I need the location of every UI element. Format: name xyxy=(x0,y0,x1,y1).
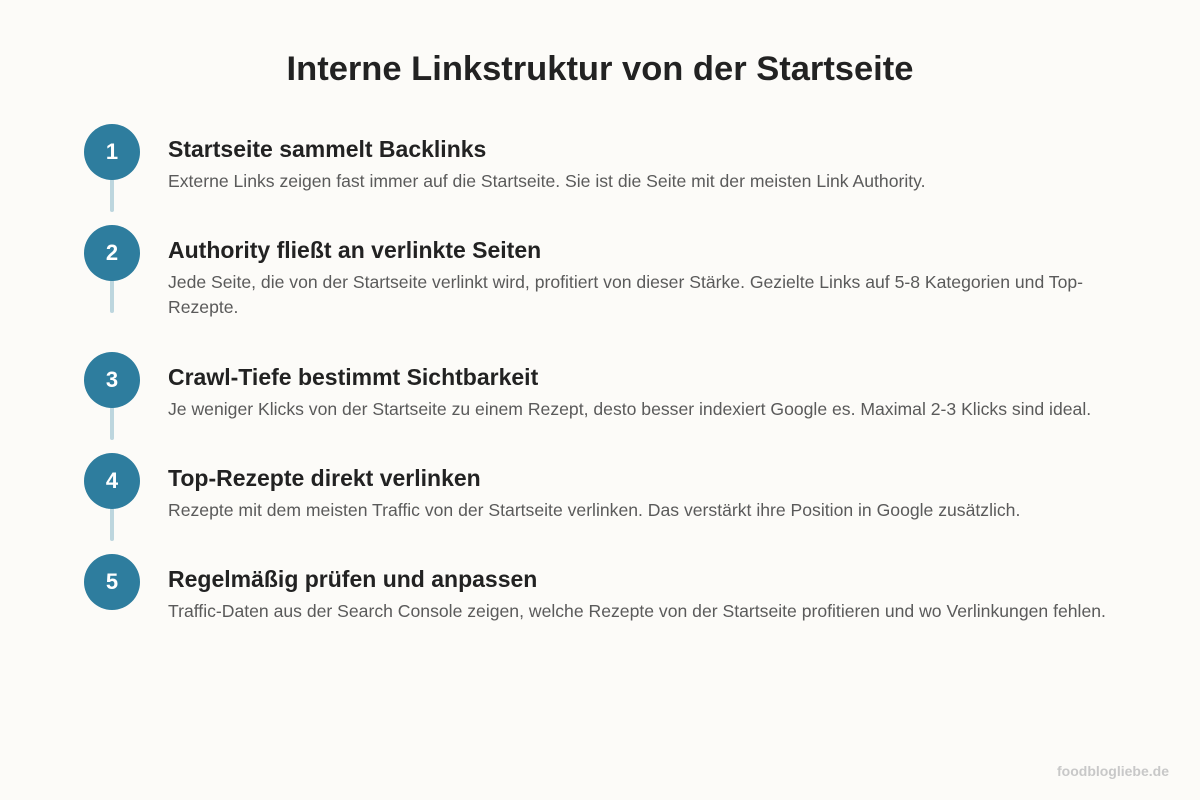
step 1 text: Externe Links zeigen fast immer auf die Startseite. Sie ist die Seite mit der meisten Link Authority. xyxy=(168,171,926,191)
step 2 xyxy=(84,225,1083,317)
step 5 text: Traffic-Daten aus der Search Console zeigen, welche Rezepte von der Startseite profitieren und wo Verlinkungen fehlen. xyxy=(168,601,1106,621)
step 4 circle: 4 xyxy=(106,468,118,493)
step 1 xyxy=(84,124,926,191)
step 2 heading: Authority fließt an verlinkte Seiten xyxy=(168,237,541,263)
step 3 heading: Crawl-Tiefe bestimmt Sichtbarkeit xyxy=(168,364,538,390)
step 1 circle xyxy=(84,124,140,180)
step 5 xyxy=(84,554,1106,621)
step 2 text: Jede Seite, die von der Startseite verlinkt wird, profitiert von dieser Stärke. Gezielte Links auf 5-8 Kategorien und Top- xyxy=(168,272,1083,292)
title: Interne Linkstruktur von der Startseite xyxy=(287,50,913,88)
step 3 circle: 3 xyxy=(106,367,118,392)
step 5 heading: Regelmäßig prüfen und anpassen xyxy=(168,566,537,592)
step 1 heading: Startseite sammelt Backlinks xyxy=(168,136,486,162)
step 2 circle xyxy=(84,225,140,281)
step 5 circle: 5 xyxy=(106,569,118,594)
connector line 1 xyxy=(110,178,114,212)
step 3 circle xyxy=(84,352,140,408)
footer brand: foodblogliebe.de xyxy=(1057,763,1169,779)
connector line 3 xyxy=(110,406,114,440)
step 1 circle: 1 xyxy=(106,139,118,164)
step 3 text: Je weniger Klicks von der Startseite zu einem Rezept, desto besser indexiert Google es. Maximal 2-3 Klicks sind ideal. xyxy=(168,399,1091,419)
step 4 circle xyxy=(84,453,140,509)
step 5 circle xyxy=(84,554,140,610)
connector line 4 xyxy=(110,507,114,541)
step 2 text xyxy=(168,272,1083,317)
connector line 2 xyxy=(110,279,114,313)
step 2 circle: 2 xyxy=(106,240,118,265)
step 4 text: Rezepte mit dem meisten Traffic von der Startseite verlinken. Das verstärkt ihre Position in Google zusätzlich. xyxy=(168,500,1020,520)
step 4 xyxy=(84,453,1020,520)
step 2 text: Rezepte. xyxy=(168,297,238,317)
step 3 xyxy=(84,352,1091,419)
step 4 heading: Top-Rezepte direkt verlinken xyxy=(168,465,481,491)
